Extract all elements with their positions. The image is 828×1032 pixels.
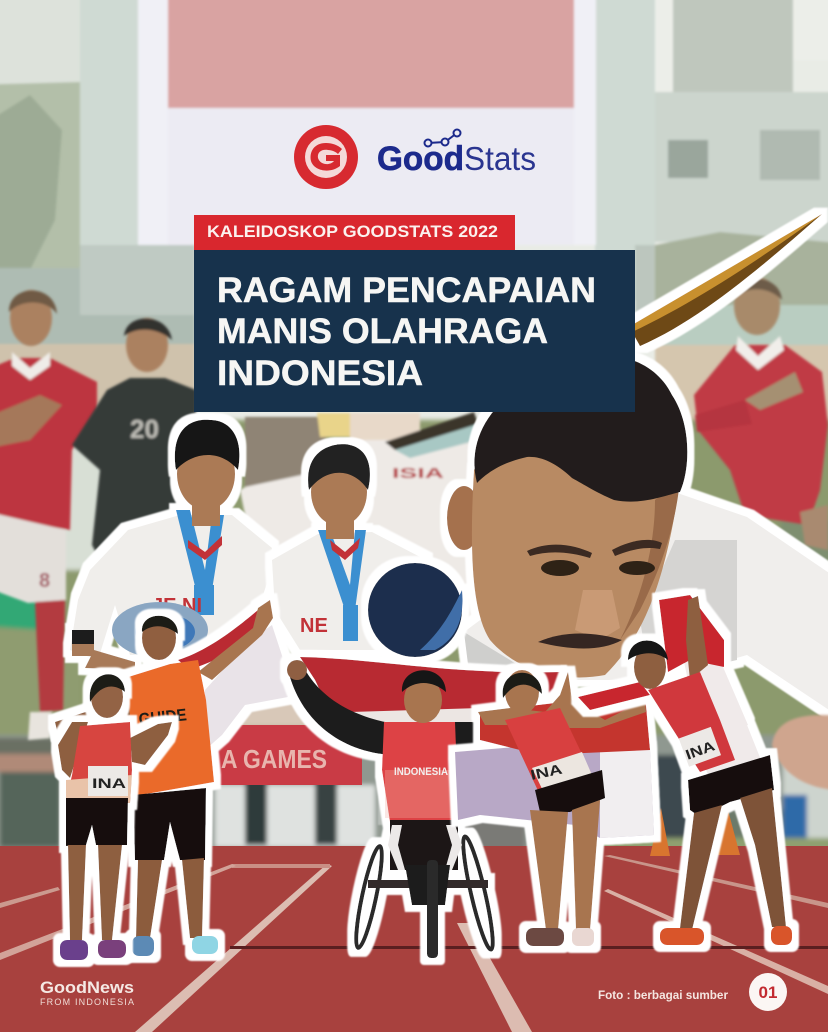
badminton athlete left (70, 420, 272, 670)
page number: 01 (759, 983, 777, 1002)
wheelchair racer with flag: INDONESIA (394, 766, 448, 778)
female runner in guide pair (58, 674, 172, 960)
title panel: INDONESIA (217, 354, 423, 393)
page number (749, 973, 787, 1011)
footer logo: GoodNews from Indonesia: FROM INDONESIA (40, 997, 134, 1007)
footballer left (0, 290, 97, 740)
trophy plate large (368, 563, 463, 657)
guide runner with flag (55, 600, 290, 956)
athlete's white jersey behind: ISIA (392, 465, 444, 482)
stadium banner: A GAMES (221, 744, 327, 774)
male runner with flag (578, 595, 792, 945)
javelin (632, 214, 822, 346)
photo credit: Foto : berbagai sumber (598, 990, 729, 1002)
goalkeeper: 20 (130, 414, 159, 444)
badminton athlete left: JE NI (152, 595, 202, 617)
javelin athlete portrait (447, 355, 828, 714)
title panel: MANIS OLAHRAGA (217, 312, 548, 351)
title panel: RAGAM PENCAPAIAN (217, 271, 596, 310)
male runner with flag: INA (683, 737, 717, 763)
footer logo: GoodNews from Indonesia (40, 978, 134, 1007)
background: field and stands (0, 420, 828, 852)
athlete's white jersey behind (240, 412, 490, 650)
logo: GoodNews Indonesia emblem (294, 125, 358, 189)
wheelchair racer with flag (287, 657, 562, 958)
female runner with large flag: INA (529, 761, 564, 783)
badminton athlete right: NE (300, 615, 328, 637)
running track (0, 808, 828, 1032)
trophy plate small (112, 602, 208, 658)
logo: GoodStats wordmark: Stats (464, 140, 536, 177)
kicker: Kaleidoskop GoodStats 2022: KALEIDOSKOP GOODSTATS 2022 (207, 222, 498, 241)
badminton athlete right (272, 444, 426, 650)
logo: GoodStats wordmark (377, 130, 536, 178)
logo: GoodStats wordmark: Good (377, 140, 464, 178)
arm at right edge (772, 715, 828, 790)
title panel (194, 250, 635, 412)
guide runner with flag: GUIDE (138, 705, 188, 729)
footer logo: GoodNews from Indonesia: GoodNews (40, 978, 134, 997)
footballer right (694, 277, 828, 550)
stadium banner (215, 725, 362, 785)
female runner with large flag (455, 670, 654, 946)
footballer left: 8 (39, 570, 50, 592)
background: stadium building and screen (0, 0, 828, 470)
kicker: Kaleidoskop GoodStats 2022 (194, 215, 515, 250)
female runner in guide pair: INA (92, 775, 126, 791)
goalkeeper (72, 318, 196, 560)
